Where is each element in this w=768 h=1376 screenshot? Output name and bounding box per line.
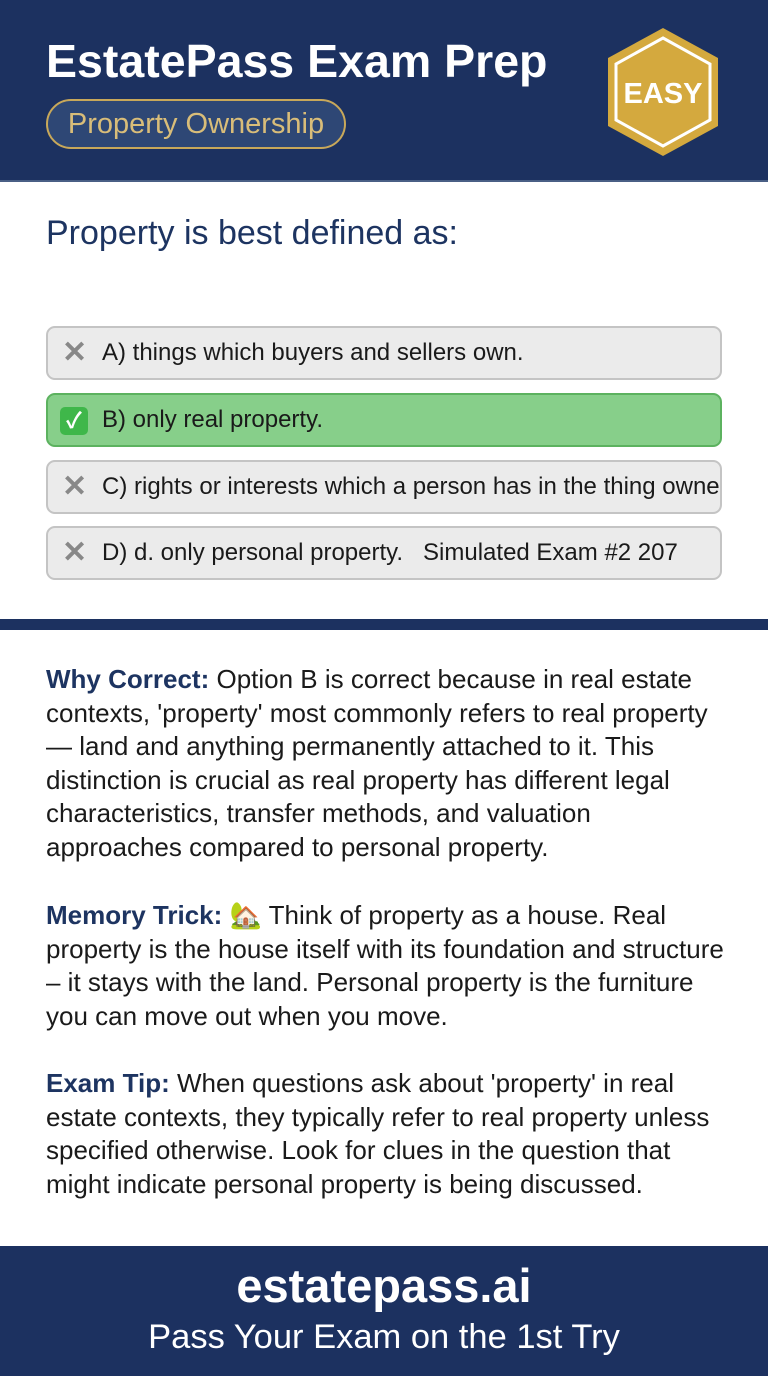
options (46, 326, 722, 580)
memory trick: property is the house itself with its foundation and structure (46, 934, 724, 964)
option D (46, 526, 722, 580)
memory trick (46, 900, 724, 1031)
exam tip: Exam Tip: When questions ask about 'property' in real (46, 1068, 674, 1098)
exam tip: specified otherwise. Look for clues in the question that (46, 1135, 670, 1165)
option C: ✕ (62, 470, 87, 503)
why correct: characteristics, transfer methods, and valuation (46, 798, 591, 828)
explanation (46, 664, 724, 1199)
badge: easy: EASY (624, 78, 702, 110)
option C (46, 460, 722, 514)
option B correct: B) only real property. (102, 406, 323, 433)
exam tip: might indicate personal property is being discussed. (46, 1169, 643, 1199)
divider band (0, 619, 768, 630)
badge: easy (608, 28, 718, 156)
why correct: — land and anything permanently attached to it. This (46, 731, 654, 761)
option B correct (46, 393, 722, 447)
why correct: distinction is crucial as real property has different legal (46, 765, 670, 795)
exam tip (46, 1068, 709, 1199)
option D: D) d. only personal property. Simulated Exam #2 207 (102, 539, 678, 566)
title: EstatePass Exam Prep (46, 35, 547, 87)
memory trick: – it stays with the land. Personal property is the furniture (46, 967, 693, 997)
why correct: approaches compared to personal property. (46, 832, 548, 862)
option A: A) things which buyers and sellers own. (102, 339, 524, 366)
topic pill (46, 99, 346, 149)
exam tip: estate contexts, they typically refer to real property unless (46, 1102, 709, 1132)
footer site: estatepass.ai (236, 1259, 532, 1312)
option A (46, 326, 722, 380)
topic pill: Property Ownership (68, 108, 324, 140)
footer tagline: Pass Your Exam on the 1st Try (148, 1318, 620, 1356)
header (0, 0, 768, 182)
option A: ✕ (62, 336, 87, 369)
option B correct: ✓ (66, 408, 82, 433)
why correct (46, 664, 708, 862)
why correct: Why Correct: Option B is correct because in real estate (46, 664, 692, 694)
question: Property is best defined as: (46, 214, 458, 252)
option D: ✕ (62, 536, 87, 569)
why correct: contexts, 'property' most commonly refers to real property (46, 698, 708, 728)
memory trick: Memory Trick: 🏡 Think of property as a house. Real (46, 900, 666, 930)
memory trick: you can move out when you move. (46, 1001, 448, 1031)
footer (0, 1246, 768, 1376)
option C: C) rights or interests which a person has in the thing owned. (102, 473, 722, 500)
